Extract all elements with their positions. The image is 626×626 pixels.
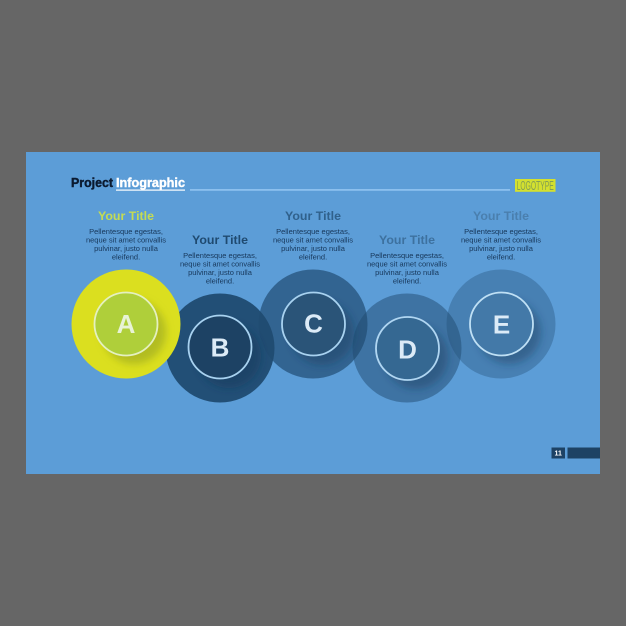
column B text: Pellentesque egestas, [183,251,257,260]
header [71,176,556,193]
column E text [461,209,541,262]
column D text: pulvinar, justo nulla [375,268,440,277]
column D text: Pellentesque egestas, [370,251,444,260]
circle C [258,270,368,378]
page number [552,448,565,458]
column D text: eleifend. [393,276,421,286]
column E text: eleifend. [487,252,515,262]
column B text: Your Title [192,233,248,247]
column C text: neque sit amet convallis [273,236,353,244]
column D text: neque sit amet convallis [367,260,447,268]
column D text [367,233,447,286]
column A text: Pellentesque egestas, [89,227,163,236]
title: Project Infographic: Infographic [116,176,185,190]
column A text [86,209,166,262]
column E text: pulvinar, justo nulla [469,244,534,253]
column B text [180,233,260,286]
column D text: Your Title [379,233,435,247]
title: Project Infographic: Project [71,176,114,190]
column C text: Your Title [285,209,341,223]
column E text: Your Title [473,209,529,223]
column A text: eleifend. [112,252,140,262]
panel: slide [26,152,600,474]
column C text: eleifend. [299,252,327,262]
title: Project Infographic [71,176,185,190]
column E text: Pellentesque egestas, [464,227,538,236]
column B text: pulvinar, justo nulla [188,268,253,277]
circle E: E [493,310,510,340]
column A text: pulvinar, justo nulla [94,244,159,253]
circle E [446,270,556,378]
column C text [273,209,353,262]
header rule [190,189,510,191]
circle D [352,294,462,402]
logotype badge [515,178,556,193]
page number: 11 [554,450,562,458]
column A text: neque sit amet convallis [86,236,166,244]
circle C: C [304,308,323,338]
column B text: neque sit amet convallis [180,260,260,268]
column B text: eleifend. [206,276,234,286]
column A text: Your Title [98,209,154,223]
column C text: Pellentesque egestas, [276,227,350,236]
circle B: B [211,332,229,362]
footer bar [568,448,600,458]
title underline [116,190,185,191]
column E text: neque sit amet convallis [461,236,541,244]
circle D: D [398,334,417,364]
circle A [72,270,180,378]
column C text: pulvinar, justo nulla [281,244,346,253]
circle B [166,294,274,402]
circle A: A [117,309,136,339]
logotype badge: LOGOTYPE [517,178,554,193]
